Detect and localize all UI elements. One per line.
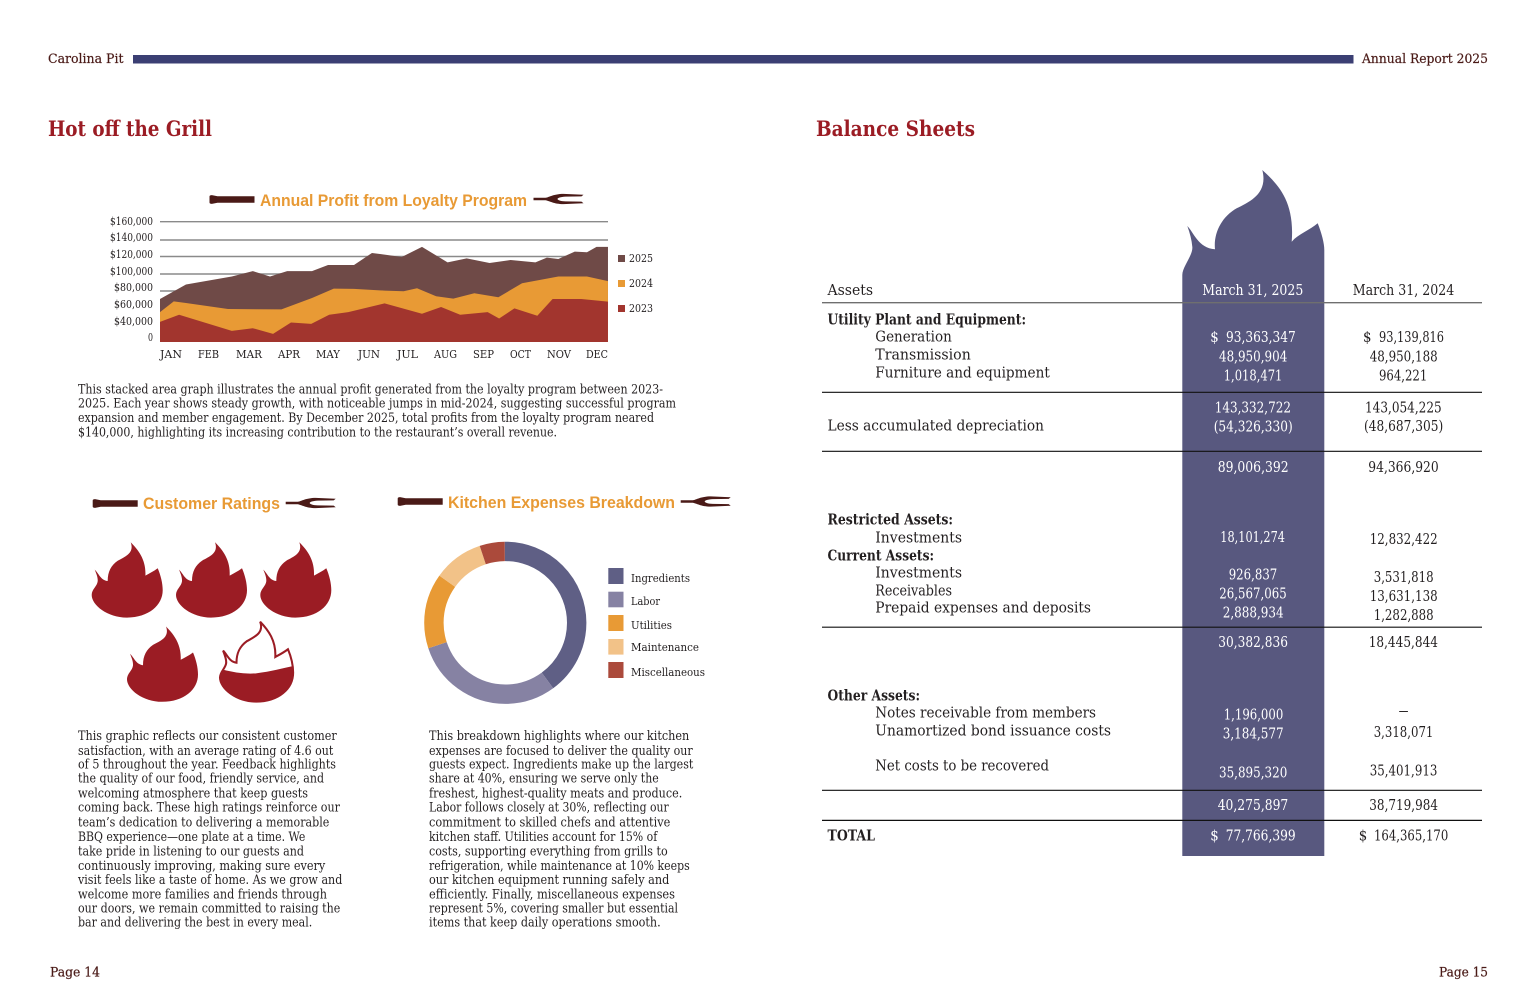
text block: expenses description: kitchen staff. Utilities account for 15% of	[429, 829, 658, 844]
column: March 31, 2025: 89,006,392	[1218, 459, 1289, 476]
text block: expenses description: guests expect. Ingredients make up the largest	[429, 757, 693, 772]
text block: chart description: This stacked area graph illustrates the annual profit generated from the loyalty program between 2023-	[78, 382, 663, 397]
column: March 31, 2025: 3,184,577	[1223, 725, 1284, 742]
donut legend: Maintenance	[631, 641, 699, 654]
row labels: Transmission	[875, 346, 971, 363]
column: March 31, 2024: (48,687,305)	[1364, 418, 1443, 435]
column: March 31, 2025: 18,101,274	[1220, 529, 1285, 546]
y axis labels: $160,000	[110, 215, 153, 228]
panel: customer ratings	[92, 494, 336, 702]
column: March 31, 2024: 964,221	[1379, 367, 1427, 384]
column: March 31, 2025: 143,332,722	[1215, 399, 1291, 416]
x axis month labels: OCT	[510, 348, 532, 361]
column: March 31, 2025: 1,196,000	[1224, 706, 1283, 723]
text block: chart description: $140,000, highlighting its increasing contribution to the restaurant’s overall revenue.	[78, 424, 557, 439]
row labels	[827, 282, 1111, 844]
row labels: Furniture and equipment	[875, 364, 1050, 381]
text block: expenses description: costs, supporting everything from grills to	[429, 843, 668, 858]
text block: expenses description: refrigeration, while maintenance at 10% keeps	[429, 858, 690, 873]
column: March 31, 2025: 48,950,904	[1219, 348, 1287, 365]
chart legend: 2025	[629, 252, 653, 265]
text block: expenses description: Labor follows closely at 30%, reflecting our	[429, 800, 669, 815]
column: March 31, 2025: (54,326,330)	[1214, 419, 1293, 436]
stacked area chart	[160, 247, 608, 342]
text block: ratings description: of 5 throughout the year. Feedback highlights	[78, 757, 336, 772]
column: March 31, 2025: 2,888,934	[1223, 604, 1284, 621]
row labels: Receivables	[875, 582, 952, 599]
column: March 31, 2024: 143,054,225	[1365, 399, 1442, 416]
column: March 31, 2024: 94,366,920	[1368, 459, 1439, 476]
header bar	[133, 55, 1354, 64]
ratings title with utensil icons	[93, 494, 336, 513]
x axis month labels	[159, 348, 608, 361]
area 2024	[160, 276, 608, 342]
x axis month labels: NOV	[547, 348, 572, 361]
column: March 31, 2025: March 31, 2025	[1202, 282, 1303, 299]
column: March 31, 2024: 35,401,913	[1370, 762, 1437, 779]
text block: ratings description: satisfaction, with an average rating of 4.6 out	[78, 743, 333, 758]
column: March 31, 2025: 77,766,399	[1226, 827, 1296, 844]
area 2023	[160, 299, 608, 342]
panel: kitchen expenses	[398, 493, 731, 694]
text block: expenses description: freshest, highest-quality meats and produce.	[429, 786, 682, 801]
column: March 31, 2024	[1353, 282, 1454, 844]
donut legend: Ingredients	[631, 572, 690, 585]
row labels: Unamortized bond issuance costs	[875, 722, 1111, 739]
x axis month labels: MAY	[316, 348, 341, 361]
y axis labels: $60,000	[114, 298, 153, 311]
donut legend: Utilities	[631, 619, 672, 632]
x axis month labels: APR	[277, 348, 301, 361]
y axis labels: $100,000	[110, 265, 153, 278]
text block: ratings description: BBQ experience—one plate at a time. We	[78, 829, 305, 844]
text block: expenses description: our kitchen equipment running safely and	[429, 872, 669, 887]
column: March 31, 2024: 13,631,138	[1370, 588, 1438, 605]
text block: expenses description: share at 40%, ensuring we serve only the	[429, 771, 659, 786]
header left label: Carolina Pit	[48, 52, 124, 67]
y axis labels: $140,000	[110, 231, 153, 244]
partial flame icon	[220, 622, 293, 702]
column: March 31, 2024: 164,365,170	[1374, 827, 1448, 844]
text block: ratings description	[77, 728, 342, 930]
column: March 31, 2024: 12,832,422	[1370, 531, 1438, 548]
y axis labels: 0	[148, 331, 153, 344]
column: March 31, 2024: $	[1359, 827, 1367, 844]
row labels: Other Assets:	[828, 687, 920, 704]
text block: chart description: 2025. Each year shows steady growth, with noticeable jumps in mid-2024, suggesting successful program	[78, 396, 676, 411]
expenses title with utensil icons: Kitchen Expenses Breakdown	[448, 493, 675, 512]
x axis month labels: DEC	[586, 348, 608, 361]
column: March 31, 2024: —	[1399, 702, 1408, 719]
text block: ratings description: visit feels like a taste of home. As we grow and	[77, 872, 342, 887]
x axis month labels: JUN	[357, 348, 380, 361]
text block: expenses description: efficiently. Finally, miscellaneous expenses	[429, 887, 675, 902]
flame column highlight	[1182, 170, 1324, 856]
x axis month labels: FEB	[198, 348, 219, 361]
chart legend	[618, 252, 653, 315]
x axis month labels: SEP	[473, 348, 495, 361]
row labels: Investments	[875, 529, 962, 546]
column: March 31, 2025	[1202, 282, 1303, 844]
text block: chart description: expansion and member engagement. By December 2025, total profits from the loyalty program neared	[78, 410, 654, 425]
column: March 31, 2025: $	[1210, 329, 1219, 346]
text block: expenses description: items that keep daily operations smooth.	[429, 915, 661, 930]
area 2025	[160, 247, 608, 342]
text block: expenses description	[429, 728, 694, 930]
header right label: Annual Report 2025	[1361, 52, 1488, 67]
donut chart	[434, 551, 577, 694]
text block: expenses description: commitment to skilled chefs and attentive	[429, 815, 670, 830]
column: March 31, 2025: 926,837	[1229, 566, 1277, 583]
column: March 31, 2025: 1,018,471	[1224, 367, 1282, 384]
column: March 31, 2024: 93,139,816	[1379, 329, 1444, 346]
page number left: Page 14	[50, 966, 100, 980]
column: March 31, 2024: March 31, 2024	[1353, 282, 1454, 299]
panel: balance sheet table	[822, 170, 1482, 856]
text block: ratings description: This graphic reflects our consistent customer	[78, 728, 338, 743]
y axis labels: $80,000	[114, 281, 153, 294]
donut legend	[608, 568, 705, 679]
column: March 31, 2025: 40,275,897	[1218, 797, 1288, 814]
column: March 31, 2024: 48,950,188	[1370, 348, 1438, 365]
column: March 31, 2025: 93,363,347	[1226, 329, 1296, 346]
chart legend: 2024	[629, 277, 653, 290]
x axis month labels: MAR	[236, 348, 263, 361]
x axis month labels: AUG	[433, 348, 457, 361]
column: March 31, 2025: 35,895,320	[1219, 764, 1287, 781]
text block: ratings description: bar and delivering the best in every meal.	[78, 915, 312, 930]
text block: ratings description: take pride in listening to our guests and	[78, 843, 304, 858]
panel: annual profit chart	[110, 191, 653, 361]
row labels: Prepaid expenses and deposits	[875, 599, 1091, 616]
y axis labels: $40,000	[114, 315, 153, 328]
table rules	[822, 303, 1482, 820]
donut legend: Labor	[631, 595, 661, 608]
heading: Balance Sheets: Balance Sheets	[816, 116, 975, 141]
row labels: Current Assets:	[828, 547, 934, 564]
column: March 31, 2024: 3,318,071	[1374, 724, 1433, 741]
heading: Hot off the Grill: Hot off the Grill	[48, 116, 212, 141]
ratings title with utensil icons: Customer Ratings	[143, 494, 280, 513]
text block: expenses description: expenses are focused to deliver the quality our	[429, 743, 694, 758]
row labels: Generation	[875, 329, 952, 346]
row labels: Utility Plant and Equipment:	[828, 311, 1026, 328]
column: March 31, 2024: 1,282,888	[1374, 607, 1434, 624]
row labels: Notes receivable from members	[875, 704, 1096, 721]
column: March 31, 2024: $	[1363, 329, 1372, 346]
row labels: Assets	[827, 282, 873, 299]
text block: ratings description: team’s dedication to delivering a memorable	[78, 815, 329, 830]
row labels: TOTAL	[828, 827, 875, 844]
x axis month labels: JAN	[159, 348, 182, 361]
chart title with utensil icons: Annual Profit from Loyalty Program	[260, 191, 527, 210]
row labels: Restricted Assets:	[828, 511, 953, 528]
column: March 31, 2024: 18,445,844	[1369, 634, 1438, 651]
page number right: Page 15	[1439, 966, 1488, 980]
flame rating icons	[92, 542, 331, 702]
row labels: Less accumulated depreciation	[828, 417, 1044, 434]
donut legend: Miscellaneous	[631, 666, 705, 679]
text block: ratings description: our doors, we remain committed to raising the	[78, 901, 340, 916]
chart legend: 2023	[629, 302, 653, 315]
text block: ratings description: the quality of our food, friendly service, and	[78, 771, 324, 786]
text block: expenses description: This breakdown highlights where our kitchen	[429, 728, 689, 743]
column: March 31, 2024: 3,531,818	[1374, 569, 1434, 586]
header	[48, 52, 1488, 67]
column: March 31, 2025: 26,567,065	[1219, 585, 1287, 602]
column: March 31, 2025: 30,382,836	[1218, 634, 1288, 651]
text block: ratings description: coming back. These high ratings reinforce our	[78, 800, 341, 815]
text block: ratings description: continuously improving, making sure every	[78, 858, 326, 873]
column: March 31, 2025: $	[1210, 827, 1219, 844]
text block: ratings description: welcoming atmosphere that keep guests	[78, 786, 308, 801]
column: March 31, 2024: 38,719,984	[1369, 797, 1438, 814]
x axis month labels: JUL	[396, 348, 419, 361]
y axis labels	[110, 215, 153, 344]
row labels: Investments	[875, 564, 962, 581]
text block: expenses description: represent 5%, covering smaller but essential	[429, 901, 678, 916]
text block: chart description	[78, 382, 676, 439]
y axis labels: $120,000	[110, 248, 153, 261]
text block: ratings description: welcome more families and friends through	[78, 887, 327, 902]
row labels: Net costs to be recovered	[875, 757, 1049, 774]
